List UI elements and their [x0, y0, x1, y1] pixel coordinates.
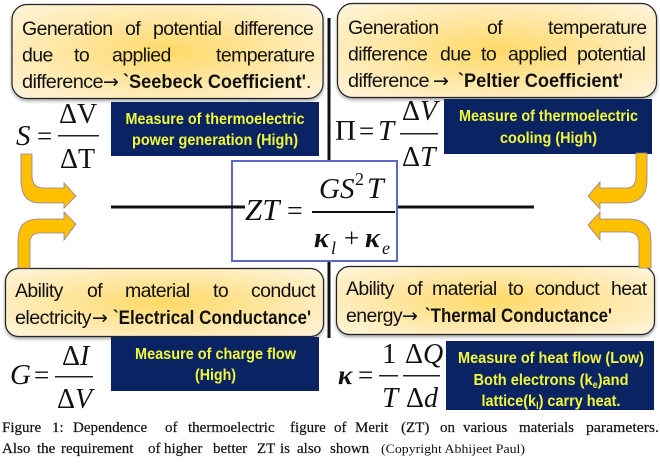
callout: cooling measure: cooling (High)	[500, 130, 597, 147]
panel: Peltier coefficient description	[338, 4, 656, 98]
figure caption: requirement	[61, 441, 134, 457]
figure caption: of	[334, 420, 346, 436]
callout: heat flow measure: )and	[598, 372, 628, 389]
formula: thermal kappa	[338, 338, 443, 414]
callout: power generation measure: Measure of thermoelectric	[126, 111, 305, 128]
panel: Peltier coefficient description: to	[481, 44, 497, 66]
arrow: Seebeck to ZT	[21, 154, 76, 208]
panel: thermal conductance description: energy	[346, 305, 403, 327]
arrow: Peltier to ZT	[588, 153, 647, 209]
arrow: electrical conductance to ZT	[18, 212, 76, 268]
figure caption: on	[440, 420, 456, 436]
panel: thermal conductance description: heat	[611, 278, 648, 300]
panel: electrical conductance description: conduct	[251, 280, 316, 302]
horizontal line left	[111, 206, 245, 208]
panel: electrical conductance description: to	[213, 280, 229, 302]
callout: heat flow measure	[446, 341, 654, 412]
panel: thermal conductance description: to	[508, 278, 524, 300]
formula: thermal kappa: Δd	[406, 383, 439, 414]
formula: Peltier	[335, 96, 440, 173]
callout: cooling measure: Measure of thermoelectric	[459, 108, 638, 125]
figure caption: Dependence	[73, 420, 147, 436]
formula: Peltier: ΔT	[402, 142, 438, 173]
figure caption	[2, 420, 659, 457]
callout: power generation measure	[111, 102, 319, 156]
figure caption: better	[213, 441, 247, 457]
panel: Peltier coefficient description: applied	[508, 44, 567, 66]
panel: thermal conductance description: conduct	[535, 278, 600, 300]
formula: Seebeck: =	[37, 121, 52, 151]
center vertical divider bottom	[328, 260, 330, 338]
panel: Peltier coefficient description: `Peltier Coefficient'	[458, 70, 623, 92]
figure caption: Figure	[2, 420, 42, 436]
panel: electrical conductance description: Ability	[15, 280, 64, 302]
callout: power generation measure: power generation (High)	[132, 132, 298, 149]
panel: Seebeck coefficient description: difference	[22, 71, 103, 93]
formula: thermal kappa: T	[382, 382, 400, 414]
figure caption: is	[280, 441, 290, 457]
formula: thermal kappa: ΔQ	[405, 339, 443, 370]
panel: Peltier coefficient description: difference	[348, 44, 427, 66]
figure caption: shown	[330, 441, 370, 457]
panel: thermal conductance description: →	[402, 305, 418, 327]
figure caption: of	[148, 441, 160, 457]
formula: Seebeck: ΔT	[60, 144, 95, 175]
panel: electrical conductance description: of	[87, 280, 103, 302]
central ZT formula box: GS	[319, 173, 355, 205]
figure caption: the	[37, 441, 56, 457]
figure caption: (Copyright Abhijeet Paul)	[381, 441, 525, 456]
central ZT formula box: κ	[314, 223, 330, 254]
panel: Seebeck coefficient description: due	[22, 44, 53, 66]
panel: thermal conductance description: of	[407, 278, 423, 300]
formula: thermal kappa: κ	[338, 360, 353, 390]
figure caption: figure	[290, 420, 326, 436]
panel: Seebeck coefficient description: `Seebeck Coefficient'	[123, 71, 306, 93]
formula: Peltier: =	[359, 116, 374, 146]
panel: Seebeck coefficient description	[12, 4, 323, 98]
horizontal line right	[397, 206, 534, 208]
panel: Seebeck coefficient description: →	[103, 71, 119, 93]
panel: Seebeck coefficient description: applied	[112, 44, 171, 66]
figure caption: various	[463, 420, 507, 436]
formula: conductance G: =	[34, 360, 49, 390]
panel: Seebeck coefficient description: temperature	[216, 44, 315, 66]
panel: Seebeck coefficient description: of	[125, 18, 141, 40]
figure caption: Merit	[355, 420, 389, 436]
panel: Peltier coefficient description: difference	[348, 70, 429, 92]
figure caption: 1:	[52, 420, 64, 436]
panel: Seebeck coefficient description: difference	[234, 18, 313, 40]
panel: thermal conductance description: `Thermal Conductance'	[425, 305, 612, 327]
central ZT formula box	[225, 161, 397, 261]
callout: charge flow measure	[111, 337, 319, 391]
panel: Peltier coefficient description: Generation	[348, 17, 438, 39]
callout: heat flow measure: Measure of heat flow (Low)	[458, 350, 644, 367]
panel: Seebeck coefficient description: .	[306, 71, 311, 93]
formula: thermal kappa: 1	[382, 338, 396, 370]
panel: electrical conductance description: material	[125, 280, 190, 302]
central ZT formula box: e	[382, 238, 390, 258]
panel: thermal conductance description	[336, 266, 654, 334]
callout: heat flow measure: Both electrons (k	[474, 372, 604, 389]
callout: heat flow measure: e	[593, 380, 598, 391]
callout: heat flow measure: ) carry heat.	[539, 393, 620, 410]
figure caption: ZT	[257, 441, 275, 457]
central ZT formula box: ZT	[245, 192, 282, 227]
callout: heat flow measure: l	[536, 401, 539, 412]
figure caption: materials	[519, 420, 574, 436]
panel: Seebeck coefficient description: to	[74, 44, 90, 66]
callout: cooling measure	[444, 99, 652, 154]
central ZT formula box: T	[367, 172, 386, 205]
central ZT formula box: +	[344, 223, 359, 253]
formula: Peltier: ΔV	[402, 96, 440, 127]
panel: Peltier coefficient description: →	[433, 70, 449, 92]
formula: Peltier: Π	[335, 115, 356, 147]
panel: electrical conductance description: →	[92, 307, 108, 329]
central ZT formula box: κ	[365, 223, 381, 254]
panel: Peltier coefficient description: potential	[577, 44, 646, 66]
callout: charge flow measure: Measure of charge flow	[135, 346, 296, 363]
panel: Peltier coefficient description: temperature	[548, 17, 647, 39]
figure caption: (ZT)	[401, 420, 429, 436]
formula: conductance G	[10, 341, 95, 415]
panel: electrical conductance description: electricity	[15, 307, 92, 329]
figure caption: also	[297, 441, 321, 457]
central ZT formula box: 2	[355, 169, 364, 189]
panel: thermal conductance description: material	[432, 278, 497, 300]
formula: conductance G: ΔV	[57, 384, 95, 415]
formula: thermal kappa: =	[358, 360, 373, 390]
arrow: thermal conductance to ZT	[588, 212, 651, 268]
figure caption: higher	[164, 441, 202, 457]
central ZT formula box: l	[331, 238, 336, 258]
panel: Seebeck coefficient description: Generation	[22, 18, 112, 40]
panel: electrical conductance description	[6, 268, 324, 336]
panel: Peltier coefficient description: due	[440, 44, 471, 66]
figure caption: thermoelectric	[188, 420, 275, 436]
formula: conductance G: ΔI	[62, 341, 91, 372]
formula: Seebeck: S	[16, 120, 31, 152]
formula: Peltier: T	[378, 115, 396, 147]
panel: Seebeck coefficient description: potential	[153, 18, 222, 40]
panel: electrical conductance description: `Electrical Conductance'	[113, 307, 311, 329]
central ZT formula box: =	[287, 196, 303, 227]
center vertical divider top	[328, 18, 330, 163]
figure caption: Also	[2, 441, 30, 457]
callout: heat flow measure: lattice(k	[482, 393, 542, 410]
figure caption: parameters.	[586, 420, 659, 436]
figure caption: of	[165, 420, 178, 436]
formula: Seebeck	[16, 99, 99, 175]
formula: Seebeck: ΔV	[59, 99, 97, 130]
formula: conductance G: G	[10, 359, 31, 391]
callout: charge flow measure: (High)	[195, 367, 236, 384]
panel: Peltier coefficient description: of	[487, 17, 503, 39]
panel: thermal conductance description: Ability	[346, 278, 395, 300]
